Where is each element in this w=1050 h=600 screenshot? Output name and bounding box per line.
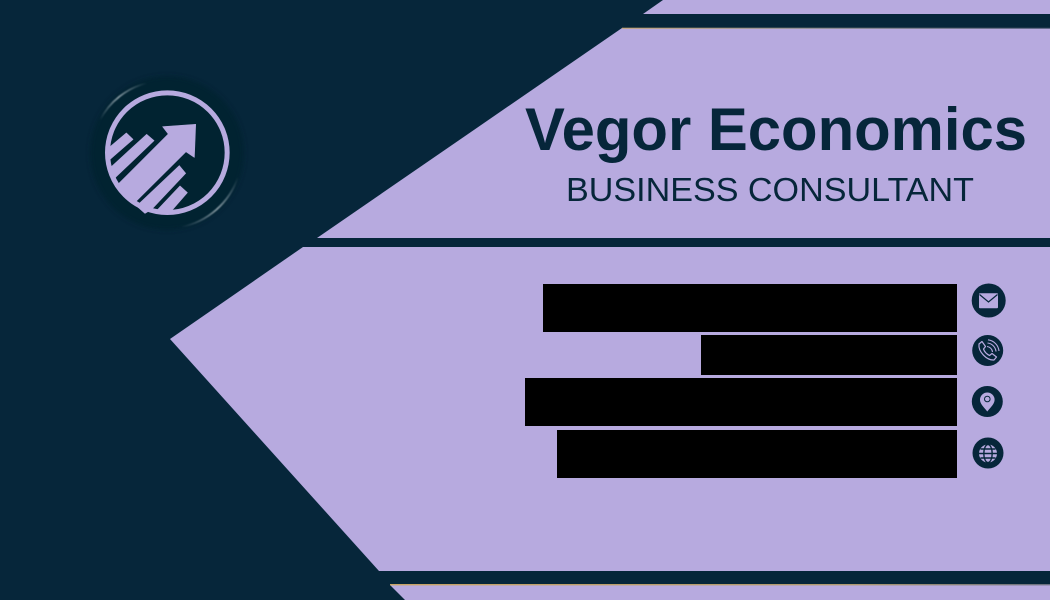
redacted address bbox=[525, 378, 957, 426]
emblem bar 3 bbox=[137, 166, 186, 213]
logo shine: lower right bbox=[181, 177, 238, 227]
subtitle: BUSINESS CONSULTANT bbox=[566, 171, 974, 208]
redacted phone bbox=[701, 335, 957, 375]
logo bbox=[90, 76, 244, 230]
redacted email bbox=[543, 284, 957, 332]
emblem bar 4 bbox=[157, 186, 187, 214]
logo shine: upper left bbox=[100, 83, 147, 120]
icon: globe bbox=[972, 438, 1004, 468]
emblem bar 2 bbox=[111, 134, 154, 181]
icon: mail bbox=[972, 284, 1006, 318]
gold line: bottom bbox=[390, 584, 1050, 585]
panel: top sliver bbox=[643, 0, 1050, 14]
gold line: top bbox=[622, 28, 1050, 29]
logo halo bbox=[90, 76, 244, 230]
emblem bar 1 bbox=[109, 133, 133, 159]
redacted website bbox=[557, 430, 957, 478]
emblem ring bbox=[107, 93, 227, 212]
icon: location pin bbox=[972, 386, 1003, 417]
emblem arrow bbox=[116, 124, 196, 204]
logo emblem bbox=[107, 93, 227, 214]
title: Vegor Economics bbox=[525, 96, 1027, 163]
panel: contact area bbox=[170, 247, 1050, 571]
panel: bottom sliver bbox=[390, 585, 1050, 600]
icon: phone bbox=[972, 335, 1003, 366]
panel: title area bbox=[317, 28, 1050, 238]
